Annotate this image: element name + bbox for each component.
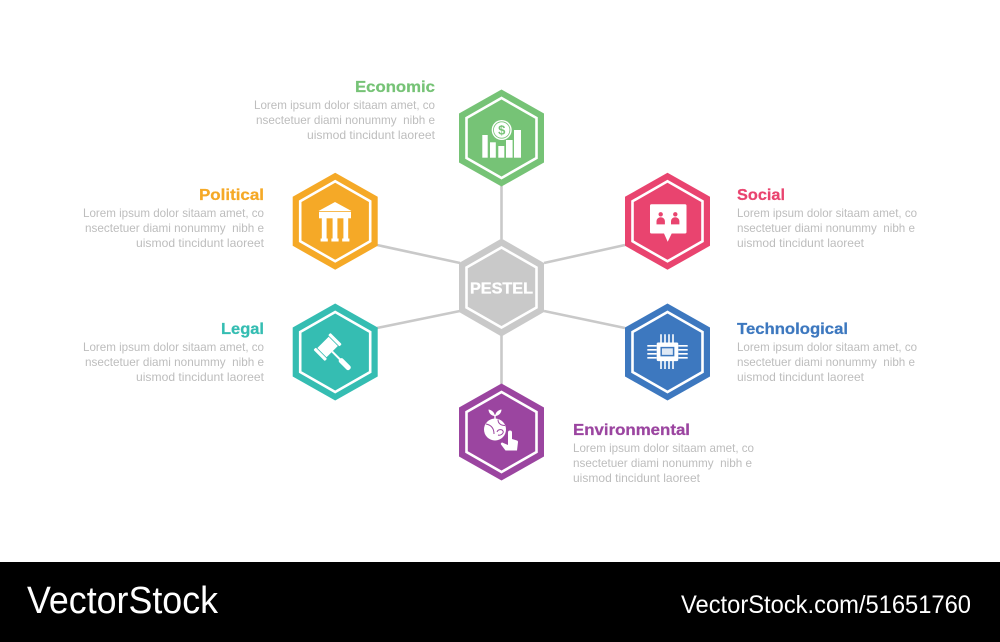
- text block: social: nsectetuer diami nonummy nibh e: [737, 221, 915, 235]
- text block: economic: Lorem ipsum dolor sitaam amet, co: [254, 98, 435, 112]
- text block: environmental: [573, 441, 754, 485]
- icon: speech bubble with people: [650, 204, 686, 242]
- text block: economic: [254, 98, 436, 142]
- footer bar: [0, 562, 1000, 642]
- text block: economic: nsectetuer diami nonummy nibh e: [256, 113, 435, 127]
- panel: environmental: [459, 384, 754, 485]
- panel: technological: [625, 304, 917, 400]
- text block: political: uismod tincidunt laoreet: [136, 236, 265, 250]
- text block: social: uismod tincidunt laoreet: [737, 236, 865, 250]
- text block: technological: [737, 340, 917, 384]
- text block: legal: Lorem ipsum dolor sitaam amet, co: [83, 340, 264, 354]
- heading: Legal: Legal: [221, 321, 264, 338]
- text block: environmental: Lorem ipsum dolor sitaam amet, co: [573, 441, 754, 455]
- panel: legal: [83, 304, 378, 400]
- panel: economic: [254, 79, 544, 186]
- icon: bar chart with dollar coin: [482, 119, 521, 158]
- icon: government building: [318, 202, 352, 242]
- heading: Social: Social: [737, 187, 785, 204]
- heading: Economic: Economic: [355, 79, 435, 96]
- text block: social: Lorem ipsum dolor sitaam amet, co: [737, 206, 917, 220]
- text block: technological: nsectetuer diami nonummy nibh e: [737, 355, 915, 369]
- text block: legal: uismod tincidunt laoreet: [136, 370, 265, 384]
- heading: Political: Political: [199, 187, 264, 204]
- text block: economic: uismod tincidunt laoreet: [307, 128, 436, 142]
- footer image id: VectorStock.com/51651760: [681, 591, 971, 619]
- text block: legal: nsectetuer diami nonummy nibh e: [85, 355, 264, 369]
- center hexagon: PESTEL: [459, 238, 544, 336]
- icon: bar chart with dollar coin: $: [498, 123, 506, 138]
- center hexagon: PESTEL: PESTEL: [470, 280, 533, 298]
- heading: Environmental: Environmental: [573, 422, 690, 439]
- connector lines: [377, 186, 625, 384]
- icon: gavel: [313, 333, 358, 378]
- heading: Technological: Technological: [737, 321, 848, 338]
- text block: political: [83, 206, 265, 250]
- text block: political: Lorem ipsum dolor sitaam amet, co: [83, 206, 264, 220]
- footer logo: VectorStock: VectorStock: [27, 580, 219, 622]
- icon: globe with sprout and pointing hand: [484, 410, 518, 450]
- panel: political: [83, 173, 378, 270]
- text block: environmental: uismod tincidunt laoreet: [573, 471, 701, 485]
- text block: social: [737, 206, 917, 250]
- text block: technological: Lorem ipsum dolor sitaam amet, co: [737, 340, 917, 354]
- text block: political: nsectetuer diami nonummy nibh e: [85, 221, 264, 235]
- panel: social: [625, 173, 917, 270]
- text block: technological: uismod tincidunt laoreet: [737, 370, 865, 384]
- text block: legal: [83, 340, 265, 384]
- icon: microchip: [647, 334, 688, 369]
- text block: environmental: nsectetuer diami nonummy nibh e: [573, 456, 752, 470]
